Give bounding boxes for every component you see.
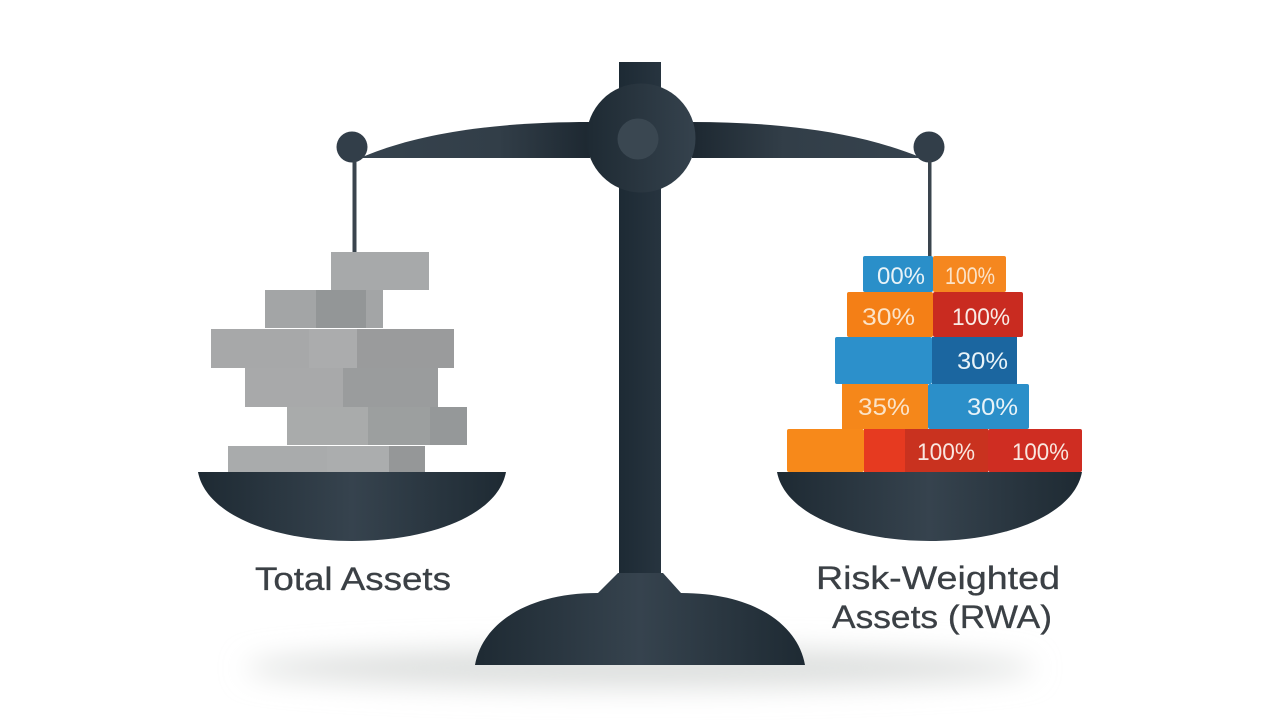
- row 5: 100%: [917, 439, 975, 466]
- right pan: [777, 472, 1082, 541]
- hub cap: [618, 118, 658, 160]
- label: total assets: Total Assets: [255, 561, 451, 597]
- base: [475, 573, 805, 665]
- row 1: [863, 256, 1006, 292]
- left knob: [336, 132, 368, 162]
- label: risk-weighted assets: [816, 560, 1060, 635]
- grey brick stack: total assets: [211, 252, 467, 472]
- right knob: [914, 132, 944, 162]
- label: risk-weighted assets: Risk-Weighted: [816, 560, 1060, 596]
- row 1: 00%: [877, 263, 925, 290]
- row 2: 100%: [952, 304, 1010, 331]
- scale stand: [475, 62, 805, 665]
- balance beam: [336, 84, 944, 192]
- row 2: [847, 292, 1023, 337]
- row 2: 30%: [862, 304, 915, 331]
- left pan: [198, 472, 506, 541]
- label: risk-weighted assets: Assets (RWA): [832, 599, 1052, 635]
- ground shadow: [245, 649, 1035, 687]
- right arm: [692, 122, 922, 158]
- row 5: 100%: [1012, 439, 1069, 466]
- right hanger: [928, 160, 932, 256]
- central hub: [586, 84, 696, 192]
- row 4: 30%: [967, 394, 1018, 421]
- column: [619, 62, 661, 582]
- row 1: 100%: [945, 263, 995, 290]
- left hanger: [352, 160, 356, 252]
- row 4: [842, 384, 1029, 429]
- left arm: [360, 122, 590, 158]
- row 3: 30%: [957, 348, 1008, 375]
- row 4: 35%: [858, 394, 910, 421]
- row 3: [835, 337, 1017, 384]
- row 5: [787, 429, 1082, 472]
- coloured block stack: risk-weighted assets: [787, 256, 1082, 472]
